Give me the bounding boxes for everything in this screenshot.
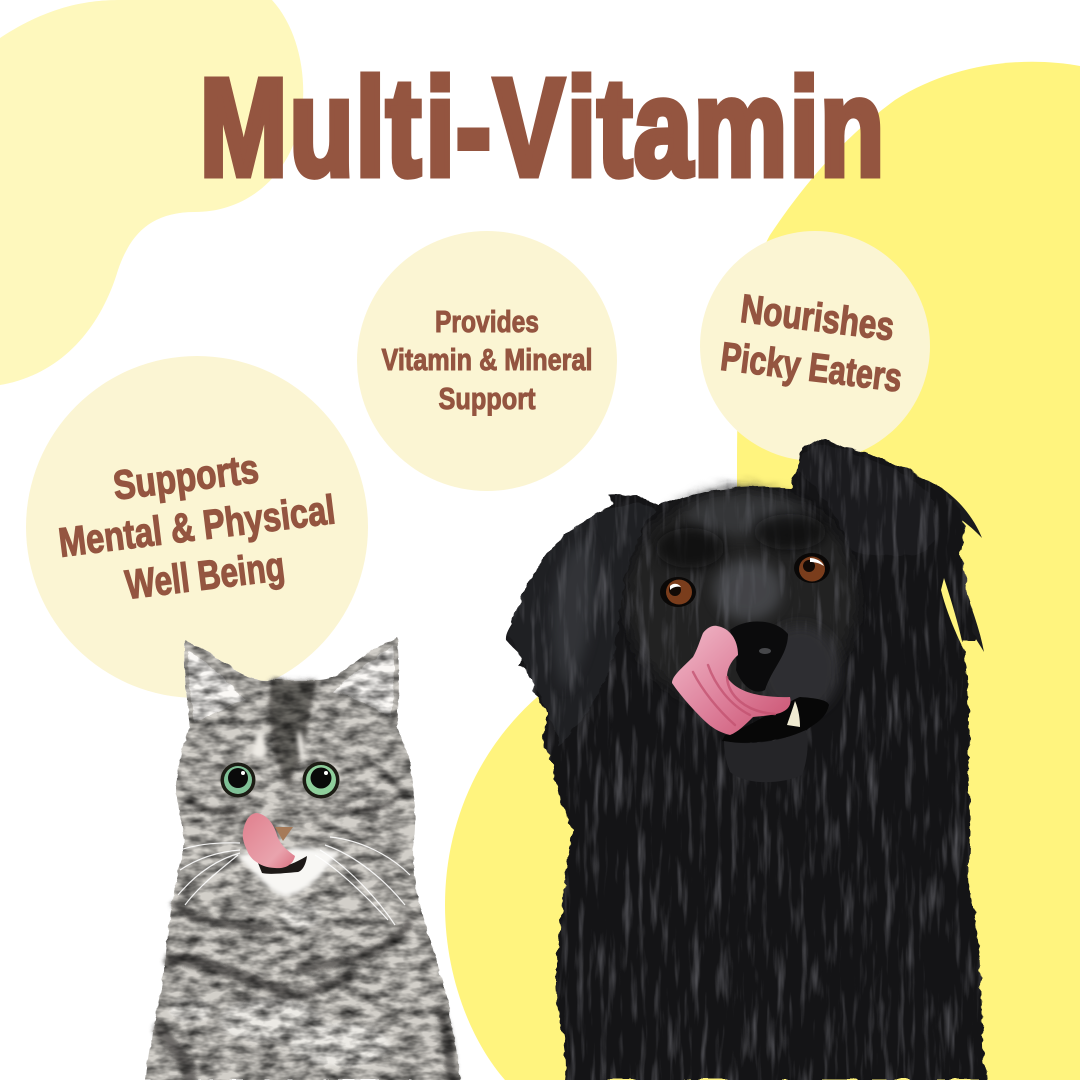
photo: tabby cat [145, 637, 460, 1080]
callout: picky eaters: Picky Eaters [718, 335, 904, 401]
callout: mental and physical well being: Mental & Physical [56, 486, 338, 566]
cat tongue [243, 813, 295, 868]
dog tooth [787, 701, 800, 727]
cat eye right [302, 762, 340, 798]
cat chest highlights [170, 902, 390, 1067]
cat whiskers [178, 837, 410, 925]
callout: picky eaters: Nourishes [738, 287, 897, 349]
dog tongue [672, 626, 791, 735]
dog eye left [660, 577, 696, 607]
dog loose hair strands [506, 487, 984, 720]
dog brow shadow right [754, 514, 826, 550]
cat ear tone right [333, 645, 394, 718]
dog nose bridge [714, 560, 782, 620]
dog hair gap [941, 578, 964, 650]
cat nose [275, 827, 293, 841]
photo: black dog [506, 438, 987, 1080]
dog nose highlight [759, 648, 771, 654]
dog mouth [722, 697, 829, 743]
cat fur silhouette [145, 637, 460, 1080]
background blob: top right [737, 62, 1080, 1080]
callout: vitamin and mineral support: Provides [435, 304, 539, 339]
dog lower lip [724, 730, 808, 782]
cat white chin [236, 848, 340, 897]
dog muzzle [760, 625, 840, 715]
dog head shading [627, 488, 857, 712]
cat dark body bands [160, 760, 452, 1080]
dog brow shadow left [656, 528, 724, 568]
dog fur silhouette [508, 438, 987, 1080]
background blob: top left [0, 0, 303, 385]
dog tongue folds [693, 665, 775, 725]
dog ear highlight [552, 540, 594, 690]
callout: vitamin and mineral support: Support [438, 381, 536, 416]
callout: vitamin and mineral support: Vitamin & Mineral [382, 342, 592, 377]
callout: mental and physical well being: Supports [111, 445, 261, 509]
cat mouth [258, 856, 307, 874]
dog eye right [794, 553, 830, 583]
cat ear tone left [188, 650, 246, 722]
dog nose [730, 621, 788, 692]
cat eye left [220, 762, 256, 798]
callout: picky eaters [700, 231, 930, 461]
callout: vitamin and mineral support [357, 231, 617, 491]
title: Multi-Vitamin [200, 50, 884, 204]
cat forehead light marks [252, 730, 305, 762]
cat forehead dark patch [268, 680, 317, 790]
dog right ear tone [798, 446, 937, 556]
dog forehead highlight [685, 495, 805, 535]
callout: mental and physical well being: Well Being [123, 543, 287, 608]
dog left ear tone [508, 503, 655, 745]
background blob: bottom centre [445, 682, 760, 1080]
callout: mental and physical well being [26, 356, 368, 698]
